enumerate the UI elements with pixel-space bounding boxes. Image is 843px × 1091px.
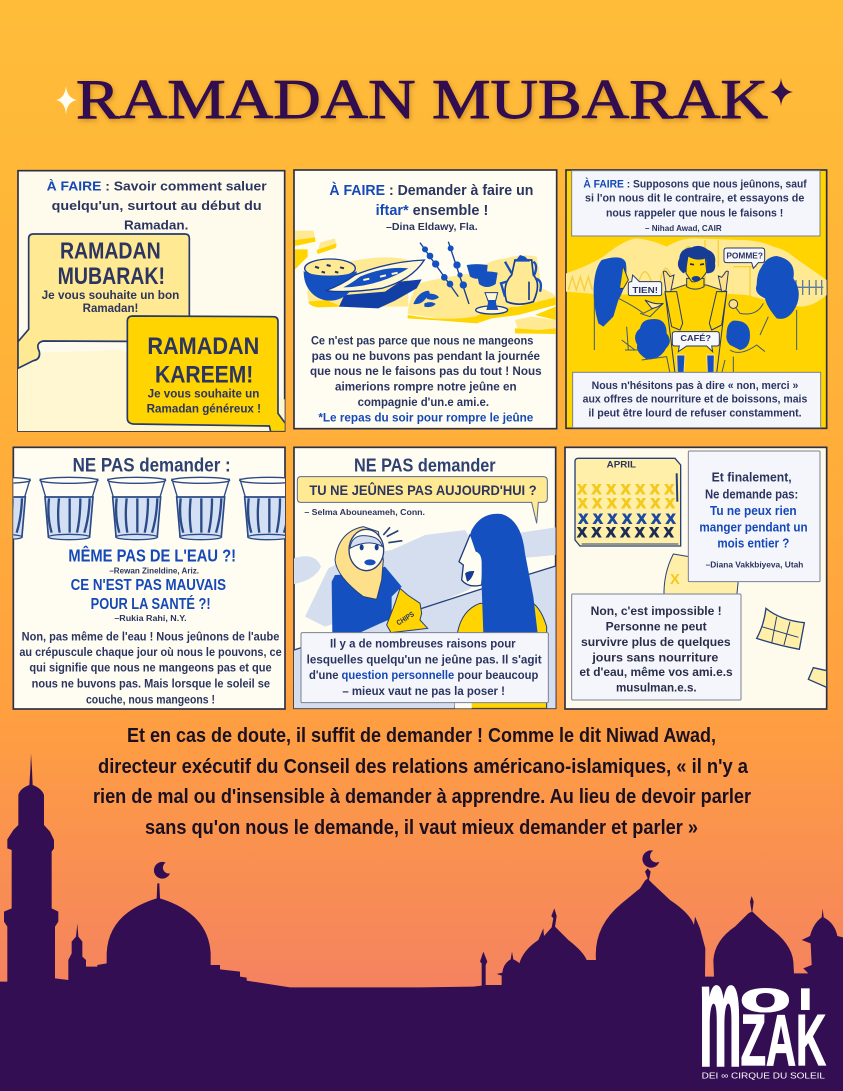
text box: d'une question personnelle pour beaucoup xyxy=(309,668,538,682)
blue quotes: CE N'EST PAS MAUVAIS xyxy=(71,577,226,594)
heading text: quelqu'un, surtout au début du xyxy=(52,198,262,213)
blue quotes: POUR LA SANTÉ ?! xyxy=(91,594,211,613)
panel: how to greet xyxy=(18,171,287,432)
logo: Mozaik: o xyxy=(739,974,791,1021)
body text: pas ou ne buvons pas pendant la journée xyxy=(312,349,540,363)
speech bubble: Ramadan Mubarak xyxy=(18,234,189,368)
heading text: À FAIRE : Demander à faire un xyxy=(329,182,533,199)
quote box: mois entier ? xyxy=(717,537,789,551)
speech bubble: Ramadan Kareem: KAREEM! xyxy=(155,362,253,389)
skewers xyxy=(420,242,469,304)
woman right xyxy=(756,256,799,319)
tea glass xyxy=(476,306,508,314)
bottom text box xyxy=(573,372,821,428)
teapot xyxy=(505,260,537,304)
quote box: Tu ne peux rien xyxy=(710,504,797,518)
body text: Non, pas même de l'eau ! Nous jeûnons de l'aube xyxy=(22,631,280,644)
top text box: À FAIRE : Supposons que nous jeûnons, sauf xyxy=(583,177,807,190)
illustration: iftar food xyxy=(295,231,556,334)
heading text xyxy=(329,182,533,233)
text box xyxy=(301,633,548,703)
calendar scrap small xyxy=(808,668,827,687)
answer box xyxy=(572,594,741,700)
body text: nous ne buvons pas. Mais lorsque le soleil se xyxy=(32,677,270,690)
logo: Mozaik xyxy=(699,933,826,1091)
central person xyxy=(665,285,727,373)
blue quotes: MÊME PAS DE L'EAU ?! xyxy=(68,546,236,566)
speech bubble: Pomme xyxy=(724,248,765,268)
rice xyxy=(305,259,355,278)
answer box: Non, c'est impossible ! xyxy=(591,604,722,618)
top text box: – Nihad Awad, CAIR xyxy=(645,223,722,233)
seated left xyxy=(635,319,670,359)
closing paragraph: rien de mal ou d'insensible à demander à apprendre. Au lieu de devoir parler xyxy=(93,786,751,808)
body text: Ce n'est pas parce que nous ne mangeons xyxy=(311,333,534,347)
row of water glasses xyxy=(0,477,298,540)
blue quotes: –Rukia Rahi, N.Y. xyxy=(114,614,187,623)
heading text: Ramadan. xyxy=(124,217,188,232)
calendar illustration: XXXXXXX xyxy=(579,510,676,526)
calendar illustration xyxy=(575,458,681,546)
body text: que nous ne le faisons pas du tout ! Nous xyxy=(310,364,542,378)
closing paragraph: Et en cas de doute, il suffit de demander ! Comme le dit Niwad Awad, xyxy=(127,725,716,747)
seated right xyxy=(726,321,750,350)
speech bubble: Ramadan Kareem: RAMADAN xyxy=(147,333,259,360)
closing paragraph xyxy=(93,725,751,839)
panel: not even water xyxy=(0,447,298,709)
silhouette: minaret and dome, left xyxy=(0,753,420,1091)
text box: Il y a de nombreuses raisons pour xyxy=(330,637,516,651)
dates xyxy=(413,291,439,307)
answer box: jours sans nourriture xyxy=(591,651,719,665)
title: RAMADAN MUBARAK xyxy=(76,69,768,131)
chips bag xyxy=(387,588,428,633)
mat xyxy=(339,279,422,308)
top text box: si l'on nous dit le contraire, et essayons de xyxy=(585,193,804,205)
heading text xyxy=(47,179,267,232)
icon: dark sparkle xyxy=(770,78,793,106)
cups held xyxy=(677,355,714,373)
silhouette: domes, right xyxy=(420,850,843,1091)
body text: au crépuscule chaque jour où nous le pouvons, ce xyxy=(19,646,282,659)
closing paragraph: sans qu'on nous le demande, il vaut mieux demander et parler » xyxy=(145,817,698,839)
calendar illustration: XXXXXXX xyxy=(577,481,675,497)
calendar illustration: XXXXXXX xyxy=(577,524,674,540)
calendar illustration: XXXXXXX xyxy=(578,495,675,511)
speech bubble: Ramadan Mubarak: Ramadan! xyxy=(83,302,138,315)
bottom text box: il peut être lourd de refuser constamment. xyxy=(588,408,802,420)
speech bubble: Ramadan Mubarak: RAMADAN xyxy=(60,237,161,263)
illustration: two people and chips: CHIPS xyxy=(395,609,416,627)
top text box: nous rappeler que nous le faisons ! xyxy=(606,208,783,220)
quote box: –Diana Vakkbiyeva, Utah xyxy=(706,560,803,570)
leaf dish xyxy=(326,260,424,292)
blue quotes xyxy=(68,546,236,623)
answer box: musulman.e.s. xyxy=(616,681,697,695)
body text xyxy=(310,333,542,425)
long-haired person xyxy=(455,603,547,708)
bottom text box: Nous n'hésitons pas à dire « non, merci » xyxy=(592,380,798,392)
quote box: Ne demande pas: xyxy=(705,487,798,501)
heading: NE PAS demander xyxy=(354,455,496,476)
panel: assume we are fasting xyxy=(566,170,827,428)
panel: not fasting today xyxy=(294,447,556,709)
woman in hijab xyxy=(332,567,402,633)
quote box xyxy=(688,451,820,582)
heading: NE PAS demander : xyxy=(73,456,231,477)
answer box: et d'eau, même vos ami.e.s xyxy=(579,665,733,679)
speech bubble: Pomme: POMME? xyxy=(726,250,763,260)
speech bubble: Cafe xyxy=(672,332,719,352)
calendar illustration: APRIL xyxy=(607,459,637,469)
attribution: – Selma Abouneameh, Conn. xyxy=(304,507,425,517)
speech bubble: Ramadan Kareem: Ramadan généreux ! xyxy=(147,402,261,415)
cups xyxy=(467,264,488,279)
body text: qui signifie que nous ne mangeons pas et que xyxy=(29,662,272,675)
illustration: two people and chips xyxy=(294,514,556,709)
panel: shared iftar xyxy=(294,170,557,429)
calendar scrap xyxy=(757,608,804,649)
quote box: manger pendant un xyxy=(699,521,808,535)
bowl xyxy=(304,272,356,300)
speech bubble: Ramadan Mubarak: MUBARAK! xyxy=(58,263,165,290)
icon: white sparkle xyxy=(56,86,77,114)
panel: a whole month xyxy=(565,447,827,709)
body text xyxy=(19,631,282,706)
answer box: survivre plus de quelques xyxy=(581,635,731,649)
text box: lesquelles quelqu'un ne jeûne pas. Il s'agit xyxy=(307,652,542,666)
speech bubble: Ramadan Kareem: Je vous souhaite un xyxy=(148,387,259,400)
heading text: À FAIRE : Savoir comment saluer xyxy=(47,179,267,194)
text box: – mieux vaut ne pas la poser ! xyxy=(342,684,505,698)
heading text: iftar* ensemble ! xyxy=(376,203,488,219)
body text: compagnie d'un.e ami.e. xyxy=(358,395,489,409)
blue quotes: –Rewan Zineldine, Ariz. xyxy=(109,566,199,575)
speech bubble: Cafe: CAFÉ? xyxy=(680,333,711,343)
speech bubble: Tien: TIEN! xyxy=(632,285,658,295)
illustration: person refusing offers xyxy=(566,238,827,373)
speech bubble: Ramadan Mubarak: Je vous souhaite un bon xyxy=(42,289,179,302)
body text: *Le repas du soir pour rompre le jeûne xyxy=(318,411,534,425)
speech bubble: Tien xyxy=(628,275,662,296)
quote box: Et finalement, xyxy=(712,471,792,485)
speech bubble: Ramadan Kareem xyxy=(127,316,285,432)
heading text: –Dina Eldawy, Fla. xyxy=(386,222,478,233)
closing paragraph: directeur exécutif du Conseil des relations américano-islamiques, « il n'y a xyxy=(98,756,749,778)
speech bubble: TU NE JEÛNES PAS AUJOURD'HUI ? xyxy=(309,481,537,498)
body text: couche, nous mangeons ! xyxy=(86,693,215,706)
speech bubble xyxy=(297,477,547,523)
logo: Mozaik: DEI ∞ CIRQUE DU SOLEIL xyxy=(702,1070,825,1080)
answer box: Personne ne peut xyxy=(606,620,707,634)
torn calendar page: X xyxy=(670,572,680,588)
woman left xyxy=(594,257,626,327)
bottom text box: aux offres de nourriture et de boissons, mais xyxy=(583,394,807,406)
torn calendar page xyxy=(664,554,738,597)
body text: aimerions rompre notre jeûne en xyxy=(335,380,517,394)
top text box xyxy=(572,171,820,236)
